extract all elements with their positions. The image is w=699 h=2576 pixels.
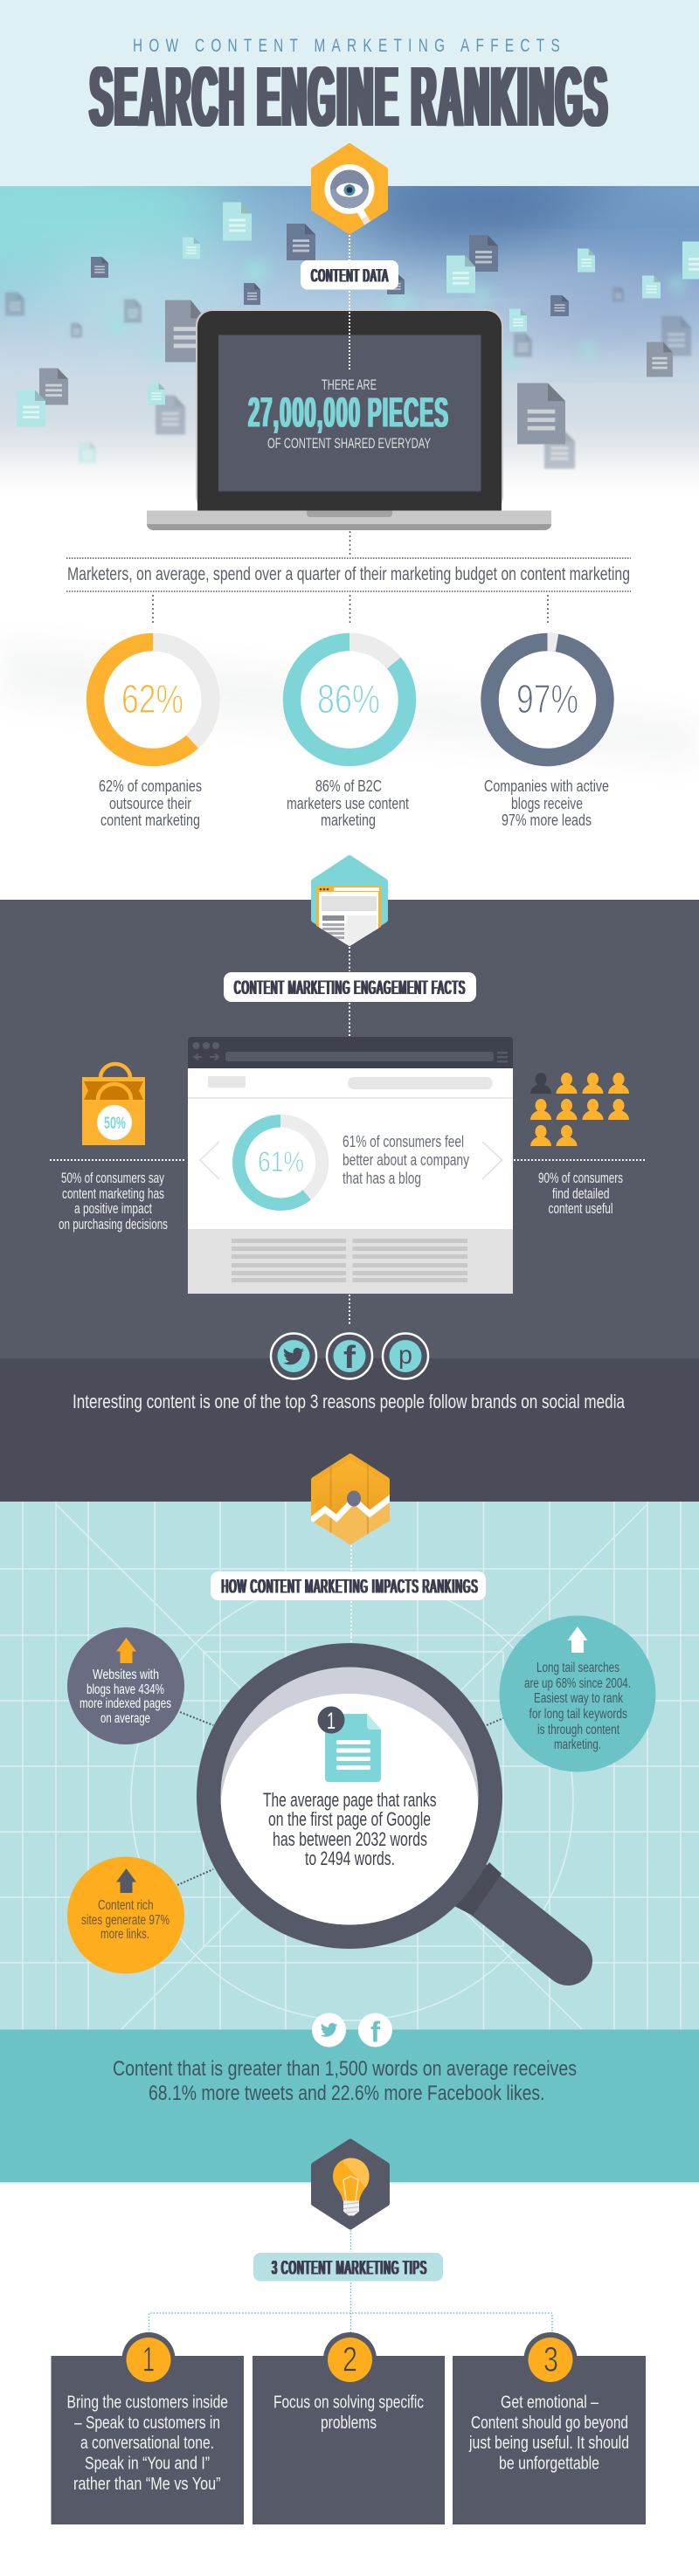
bubble: websites with blogs: blogs have 434% [87, 1682, 164, 1697]
icon: twitter white circle [312, 2013, 346, 2048]
tip 3 text [468, 2393, 629, 2474]
tip 1 text: Speak in “You and I” [85, 2455, 210, 2474]
stat: 50% of consumers: content marketing has [62, 1186, 164, 1202]
laptop text: there are: THERE ARE [322, 377, 377, 393]
tip 2 text [273, 2393, 424, 2433]
donut: 61% [239, 1121, 322, 1205]
handle [454, 1862, 568, 1961]
chevron right [482, 1142, 502, 1179]
bubble: long tail searches: marketing. [554, 1737, 601, 1752]
bubble: long tail searches: for long tail keywords [529, 1707, 627, 1722]
stat: 50% of consumers: a positive impact [74, 1201, 152, 1217]
blog stat text: that has a blog [343, 1169, 421, 1187]
caption: 97% [484, 777, 609, 829]
bubble: websites with blogs: more indexed pages [80, 1696, 171, 1711]
icon: shopping bag 50%: 50% [104, 1115, 126, 1133]
tip 3 text: Content should go beyond [471, 2414, 628, 2433]
bubble: content rich sites [67, 1857, 184, 1974]
connector: content data line [349, 235, 350, 371]
icon: ten people, nine highlighted [530, 1073, 629, 1146]
lens text: The average page that ranks [263, 1789, 437, 1811]
section label: engagement facts [224, 972, 476, 1002]
icon: facebook [327, 1333, 372, 1378]
chevron left [200, 1142, 219, 1179]
caption: 86%: 86% of B2C [315, 777, 382, 795]
stat: 50% of consumers [50, 1160, 185, 1233]
caption: 62%: outsource their [109, 795, 191, 812]
section label: tips [253, 2253, 443, 2282]
stat: 90% of consumers: 90% of consumers [538, 1171, 623, 1186]
donut: 86%: 86% [317, 676, 380, 722]
tip 3 text: just being useful. It should [468, 2434, 629, 2453]
caption: 97%: 97% more leads [502, 811, 592, 829]
donut: 62%: 62% [121, 676, 183, 722]
section label: tips: 3 CONTENT MARKETING TIPS [272, 2257, 427, 2278]
icon: light bulb hexagon [314, 2142, 387, 2227]
blurred documents [5, 287, 691, 468]
icon: magnifier and eye hexagon [314, 146, 385, 231]
lens text: has between 2032 words [273, 1828, 427, 1850]
icon: facebook white circle: f [370, 2016, 381, 2048]
word count text: Content that is greater than 1,500 words on average receives [113, 2057, 577, 2081]
donut: 86% [287, 595, 409, 829]
bubble: content rich sites: more links. [100, 1927, 149, 1942]
tip 3: 3 [543, 2341, 558, 2379]
tip 1 text: rather than “Me vs You” [73, 2475, 220, 2494]
panel: word count band [0, 2030, 699, 2184]
blog stat text: better about a company [343, 1150, 470, 1169]
caption: 97%: Companies with active [484, 777, 609, 795]
bubble: long tail searches: Long tail searches [536, 1661, 619, 1675]
tip 1 text: a conversational tone. [80, 2434, 214, 2453]
icon: web page hexagon [314, 858, 385, 956]
panel: engagement facts background [0, 900, 699, 1502]
icon: pinterest [383, 1333, 428, 1378]
bubble: content rich sites: Content rich [98, 1898, 154, 1913]
browser footer [188, 1229, 513, 1294]
caption: 62%: content marketing [100, 811, 200, 829]
teal documents [17, 203, 699, 426]
stat: 90% of consumers: find detailed [552, 1186, 610, 1202]
caption: 62% [99, 777, 202, 829]
icon: facebook: f [343, 1339, 356, 1375]
tip 3 [453, 2332, 646, 2524]
icon: facebook white circle [358, 2013, 392, 2048]
grey documents [91, 224, 569, 316]
blog stat text: 61% of consumers feel [343, 1132, 464, 1150]
icon: rising chart hexagon [311, 1454, 390, 1544]
connector tree: tips [149, 2230, 552, 2333]
icon: shopping bag 50% [82, 1064, 145, 1145]
browser window [188, 1037, 513, 1294]
magnifying glass [197, 1643, 568, 1961]
caption: 86%: marketers use content [287, 795, 409, 812]
icon: document with badge 1 [318, 1707, 381, 1782]
section label: rankings [211, 1571, 486, 1600]
section label: content data [301, 260, 398, 290]
bubble: websites with blogs [67, 1627, 184, 1744]
tip 2 text: Focus on solving specific [273, 2393, 424, 2413]
laptop [147, 309, 551, 530]
tip 1 text [66, 2393, 228, 2494]
connector dots: bubbles to magnifier [177, 1712, 503, 1885]
tip 2 [253, 2332, 445, 2524]
stat: 50% of consumers: on purchasing decisions [59, 1217, 168, 1233]
caption: 86%: marketing [321, 811, 376, 829]
stat: 50% of consumers: 50% of consumers say [61, 1171, 165, 1186]
icon: pinterest: p [398, 1341, 412, 1370]
bubble: content rich sites: sites generate 97% [81, 1913, 170, 1928]
bubble: long tail searches: are up 68% since 2004. [524, 1676, 631, 1691]
donut: 62% [95, 595, 211, 829]
panel: soft grey smear behind donuts [0, 642, 699, 764]
connector: browser to social [349, 1295, 350, 1326]
tip 1 [51, 2332, 244, 2524]
icon: twitter [271, 1333, 316, 1378]
caption: 97%: blogs receive [511, 795, 583, 812]
lens text [263, 1789, 437, 1869]
tip 3 text: Get emotional – [501, 2393, 599, 2413]
panel: rankings background grid [0, 1502, 699, 2030]
tip 3 text: be unforgettable [499, 2455, 599, 2474]
tip 1 text: – Speak to customers in [74, 2414, 220, 2433]
tip 1: 1 [142, 2341, 155, 2379]
bubble: long tail searches [500, 1616, 655, 1771]
donut: 61%: 61% [258, 1146, 304, 1178]
caption: 86% [287, 777, 409, 829]
connector: rankings [350, 1545, 352, 1642]
lens text: to 2494 words. [305, 1847, 395, 1869]
icon: document with badge 1: 1 [327, 1708, 336, 1734]
panel: hero background with floating documents [0, 140, 699, 535]
laptop text: of content shared everyday: OF CONTENT SHARED EVERYDAY [267, 436, 431, 452]
lens text: on the first page of Google [268, 1808, 431, 1830]
stat: 90% of consumers: content useful [549, 1201, 613, 1217]
bubble: long tail searches: is through content [537, 1723, 620, 1737]
donut: 97%: 97% [516, 676, 578, 722]
blog stat text [343, 1132, 470, 1187]
tip 2 text: problems [321, 2414, 377, 2433]
section label: content data: CONTENT DATA [311, 266, 389, 287]
connector: engagement [349, 947, 350, 1036]
word count text: 68.1% more tweets and 22.6% more Facebook likes. [149, 2082, 545, 2105]
panel: header [0, 0, 699, 187]
bubble: websites with blogs: Websites with [93, 1668, 159, 1682]
donut: 97% [484, 595, 609, 829]
bubble: long tail searches: Easiest way to rank [534, 1691, 623, 1706]
stat: 90% of consumers [514, 1160, 646, 1217]
tip 1 text: Bring the customers inside [66, 2393, 228, 2413]
tip 2: 2 [343, 2341, 357, 2379]
caption: 62%: 62% of companies [99, 777, 202, 795]
bubble: websites with blogs: on average [100, 1711, 150, 1726]
word count text [113, 2057, 577, 2105]
laptop: 27,000,000 PIECES [248, 390, 449, 437]
